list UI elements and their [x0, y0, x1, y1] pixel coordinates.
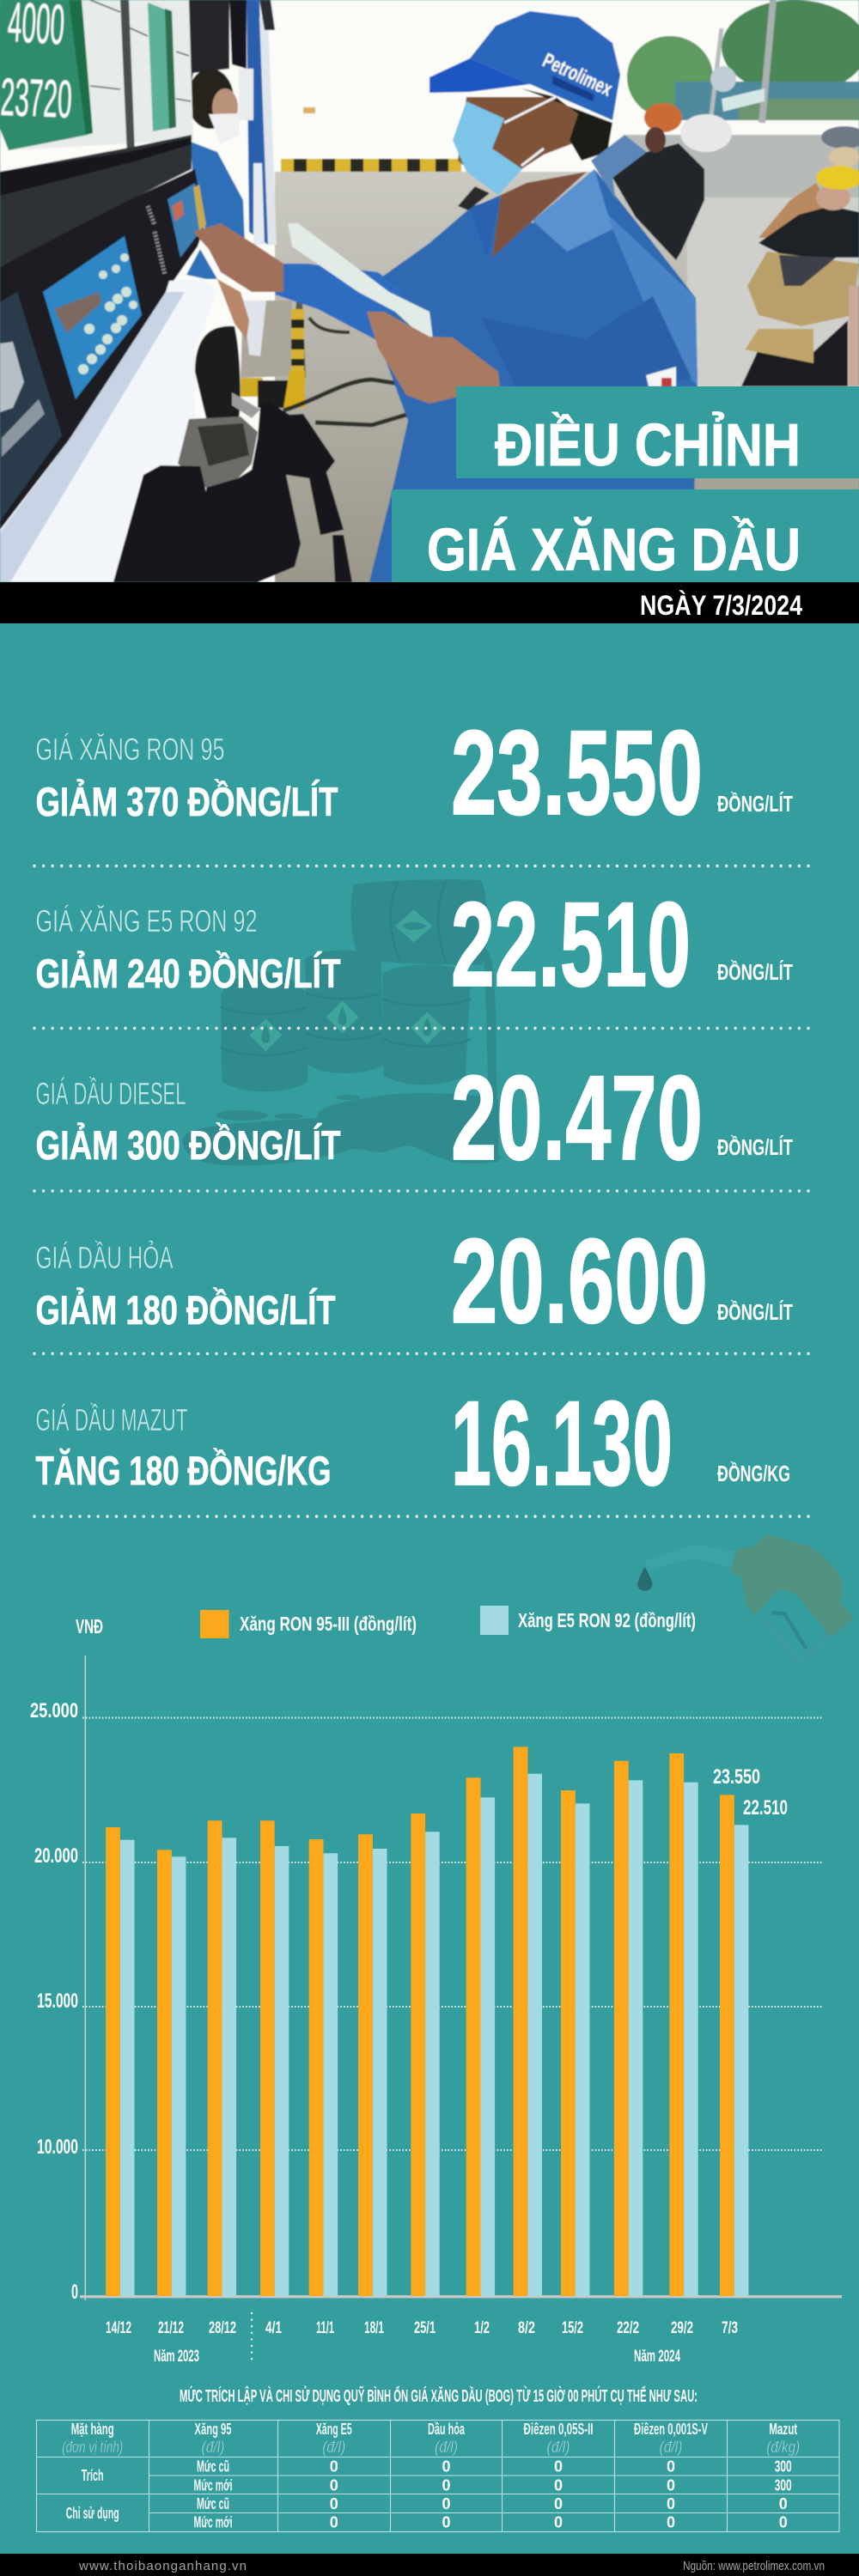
price row: RON 95 [36, 705, 793, 840]
table: stabilisation fund: (đ/l) [660, 2439, 682, 2456]
table: stabilisation fund: Điêzen 0,001S-V [634, 2421, 708, 2438]
chart y-axis labels: 20.000 [34, 1844, 78, 1868]
table: stabilisation fund: 0 [330, 2495, 338, 2512]
table: stabilisation fund: Dầu hỏa [428, 2421, 466, 2438]
price row: RON 95: 23.550 [451, 705, 703, 840]
price row: mazut: GIÁ DẦU MAZUT [36, 1402, 187, 1437]
bar value labels [713, 1765, 788, 1820]
chart y-axis labels [30, 1615, 103, 2304]
title box: ĐIỀU CHỈNH: ĐIỀU CHỈNH [495, 411, 801, 478]
table: stabilisation fund: 300 [775, 2458, 792, 2476]
table: stabilisation fund: Mazut [769, 2421, 797, 2438]
chart x-axis dates: 11/1 [316, 2319, 334, 2337]
table: stabilisation fund: 0 [667, 2458, 675, 2476]
table: stabilisation fund: 0 [554, 2458, 563, 2476]
table: stabilisation fund: Mức mới [194, 2476, 232, 2494]
title box: GIÁ XĂNG DẦU: GIÁ XĂNG DẦU [427, 516, 801, 583]
table: stabilisation fund: 0 [442, 2458, 451, 2476]
table: stabilisation fund: (đ/l) [546, 2439, 570, 2456]
chart gridlines [82, 1717, 823, 2150]
price row: mazut [36, 1376, 790, 1510]
table: stabilisation fund: 0 [554, 2495, 563, 2512]
table: stabilisation fund: 0 [667, 2514, 675, 2531]
chart x-axis dates: 15/2 [562, 2319, 583, 2337]
price row: diesel: 20.470 [451, 1050, 703, 1185]
chart x-axis dates: Năm 2024 [634, 2348, 680, 2366]
chart x-axis dates: 18/1 [364, 2319, 384, 2337]
chart x-axis dates: 21/12 [158, 2319, 184, 2337]
chart x-axis dates [106, 2319, 738, 2366]
table: stabilisation fund: (đ/l) [322, 2439, 345, 2456]
hero photo: attendant at fuel pump: Petrolimex [539, 49, 616, 101]
price row: RON 95: ĐỒNG/LÍT [717, 791, 793, 817]
chart axes [80, 1656, 842, 2300]
price row: mazut: TĂNG 180 ĐỒNG/KG [36, 1448, 332, 1493]
footer band [0, 2554, 859, 2576]
title box: GIÁ XĂNG DẦU [392, 489, 859, 583]
table: stabilisation fund: (đ/l) [435, 2439, 458, 2456]
table: stabilisation fund: 0 [330, 2514, 338, 2531]
table: stabilisation fund: 0 [667, 2495, 675, 2512]
table: stabilisation fund: Xăng 95 [194, 2421, 232, 2438]
price row: E5 RON 92: GIÁ XĂNG E5 RON 92 [36, 903, 258, 939]
table: stabilisation fund: 0 [667, 2476, 675, 2494]
price row: kerosene: 20.600 [451, 1213, 708, 1348]
price row: diesel [36, 1050, 793, 1185]
table: stabilisation fund: 0 [779, 2495, 788, 2512]
table: stabilisation fund: Xăng E5 [316, 2421, 352, 2438]
table: stabilisation fund: 0 [779, 2514, 788, 2531]
date band: NGÀY 7/3/2024 [640, 590, 802, 621]
chart x-axis dates: 8/2 [518, 2319, 535, 2337]
chart x-axis dates: 4/1 [265, 2319, 282, 2337]
chart y-axis labels: 0 [71, 2281, 78, 2304]
price row: RON 95: GIÁ XĂNG RON 95 [36, 732, 225, 767]
table: stabilisation fund: Mức cũ [197, 2495, 229, 2512]
price row: kerosene: ĐỒNG/LÍT [717, 1299, 793, 1325]
chart x-axis dates: 7/3 [722, 2319, 738, 2337]
price row: kerosene [36, 1213, 793, 1348]
legend: E5 RON 92: Xăng E5 RON 92 (đồng/lít) [518, 1609, 696, 1631]
table: stabilisation fund: 0 [554, 2514, 563, 2531]
table: stabilisation fund: 300 [775, 2476, 792, 2494]
table: stabilisation fund: 0 [330, 2476, 338, 2494]
chart x-axis dates: 1/2 [474, 2319, 490, 2337]
price row: mazut: ĐỒNG/KG [717, 1461, 790, 1486]
legend: RON 95-III: Xăng RON 95-III (đồng/lít) [240, 1613, 417, 1635]
table: stabilisation fund: (đ/kg) [766, 2439, 800, 2456]
chart y-axis labels: 10.000 [37, 2136, 78, 2159]
chart x-axis dates: 28/12 [209, 2319, 236, 2337]
date band [0, 582, 859, 623]
bar value labels: 23.550 [713, 1765, 760, 1789]
table: stabilisation fund: Trích [82, 2467, 104, 2484]
table: stabilisation fund: 0 [442, 2476, 451, 2494]
footer band: Nguồn: www.petrolimex.com.vn [683, 2559, 825, 2573]
table: stabilisation fund: Điêzen 0,05S-II [524, 2421, 593, 2438]
price row: mazut: 16.130 [451, 1376, 673, 1510]
price row: RON 95: GIẢM 370 ĐỒNG/LÍT [36, 779, 338, 824]
hero photo: attendant at fuel pump: 23720 [0, 68, 73, 130]
table: stabilisation fund [36, 2420, 839, 2531]
table: stabilisation fund: Mặt hàng [71, 2421, 114, 2438]
table: stabilisation fund: 0 [554, 2476, 563, 2494]
table: stabilisation fund: 0 [442, 2514, 451, 2531]
chart y-axis labels: VNĐ [76, 1615, 103, 1637]
bar chart [106, 1747, 748, 2296]
price row: E5 RON 92: ĐỒNG/LÍT [717, 959, 793, 985]
title box: ĐIỀU CHỈNH [456, 386, 859, 478]
chart x-axis dates: Năm 2023 [154, 2348, 199, 2366]
table: stabilisation fund: Mức mới [194, 2514, 232, 2531]
footer band: www.thoibaonganhang.vn [78, 2559, 247, 2573]
chart y-axis labels: 15.000 [37, 1990, 78, 2013]
legend: E5 RON 92 [480, 1606, 696, 1635]
price row: kerosene: GIÁ DẦU HỎA [36, 1239, 174, 1275]
price row: diesel: GIẢM 300 ĐỒNG/LÍT [36, 1122, 341, 1168]
background illustration: oil barrels and spill [183, 879, 501, 1165]
table: stabilisation fund: Chỉ sử dụng [66, 2505, 119, 2522]
table: stabilisation fund: 0 [442, 2495, 451, 2512]
chart x-axis dates: 29/2 [671, 2319, 693, 2337]
hero photo: attendant at fuel pump [0, 0, 859, 582]
price row: E5 RON 92: 22.510 [451, 877, 691, 1012]
chart y-axis labels: 25.000 [30, 1699, 78, 1722]
chart x-axis dates: 22/2 [617, 2319, 639, 2337]
table: stabilisation fund: Mức cũ [197, 2458, 229, 2476]
table: stabilisation fund: (đơn vị tính) [62, 2439, 123, 2456]
price row: E5 RON 92 [36, 877, 793, 1012]
table: stabilisation fund: (đ/l) [201, 2439, 225, 2456]
icon: fuel nozzle with drop [637, 1534, 854, 1662]
legend: RON 95-III [200, 1610, 417, 1638]
price row: kerosene: GIẢM 180 ĐỒNG/LÍT [36, 1287, 336, 1333]
table: stabilisation fund: 0 [330, 2458, 338, 2476]
price row: diesel: ĐỒNG/LÍT [717, 1134, 793, 1160]
chart x-axis dates: 14/12 [106, 2319, 131, 2337]
price row: E5 RON 92: GIẢM 240 ĐỒNG/LÍT [36, 951, 341, 996]
bar value labels: 22.510 [743, 1796, 788, 1820]
chart x-axis dates: 25/1 [414, 2319, 436, 2337]
price row: diesel: GIÁ DẦU DIESEL [36, 1076, 186, 1111]
